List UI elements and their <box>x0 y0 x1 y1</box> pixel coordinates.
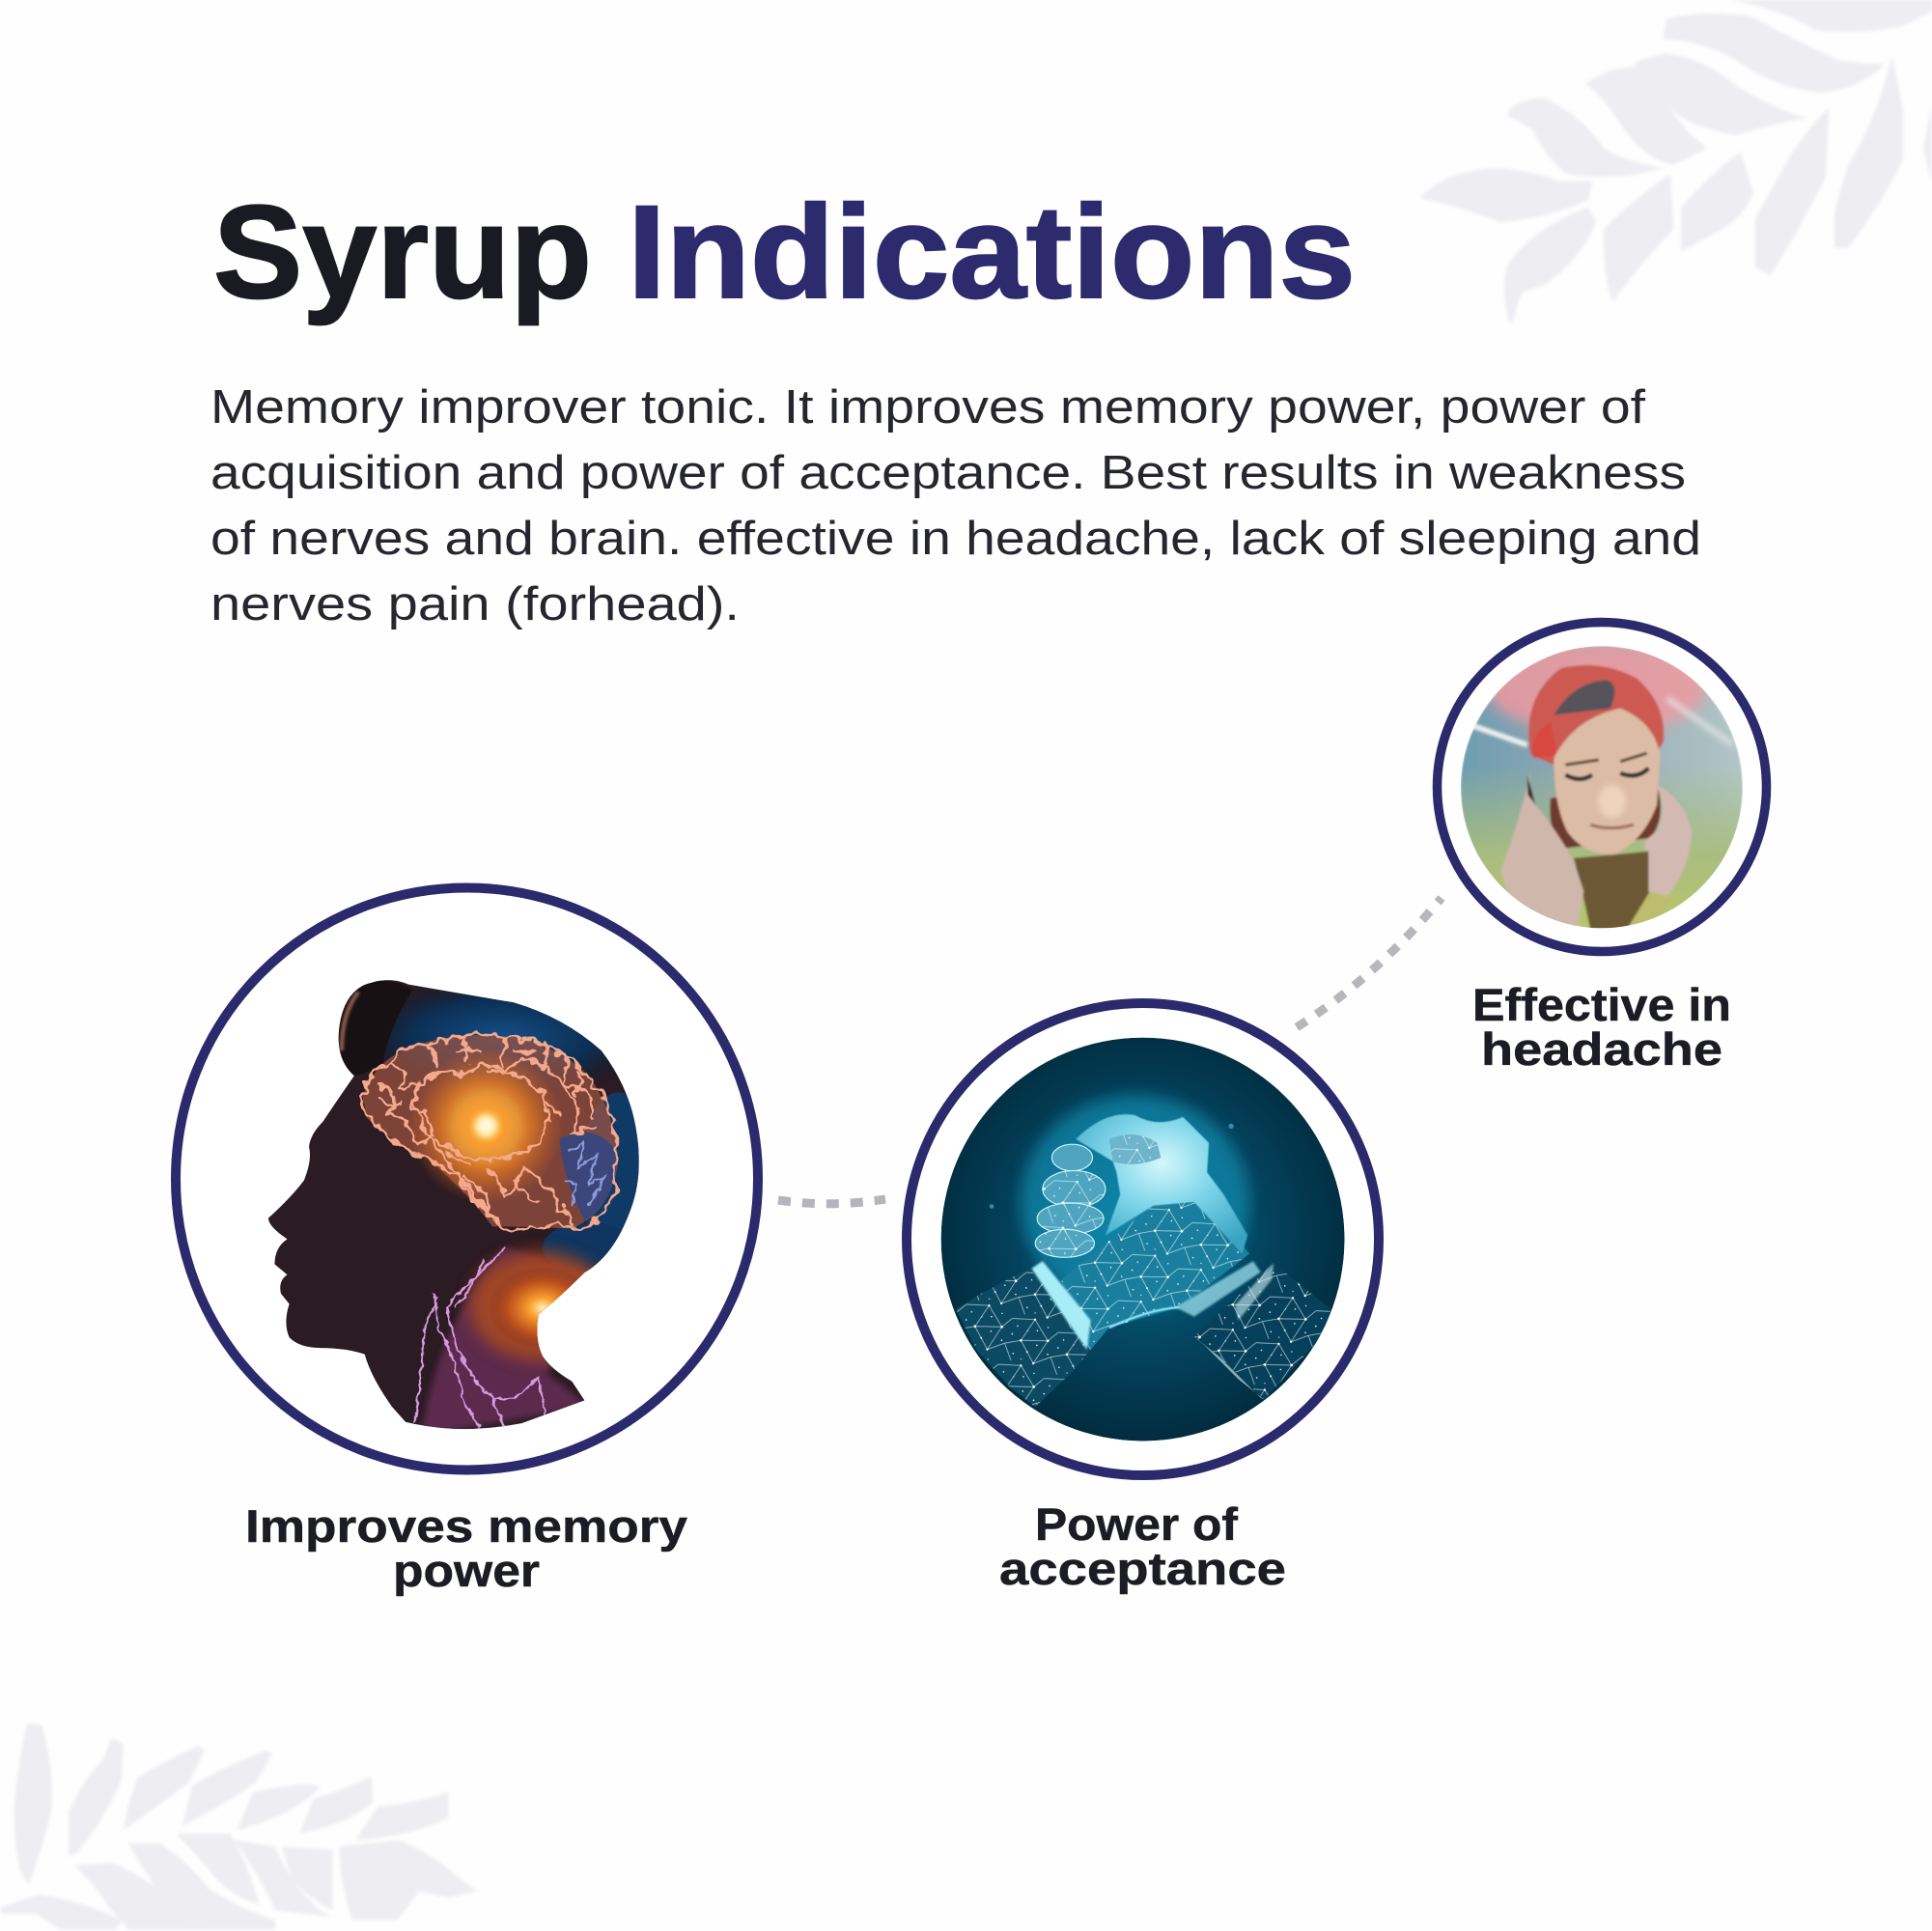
image: glowing clasped hands <box>941 1038 1345 1441</box>
label: power of acceptance: acceptance <box>999 1543 1286 1594</box>
dotted connector: acceptance to headache <box>1297 898 1442 1027</box>
label: power of acceptance <box>999 1498 1286 1594</box>
circle: improves memory power <box>176 888 758 1469</box>
circle: power of acceptance <box>907 1003 1379 1475</box>
circle: effective in headache <box>1437 622 1767 952</box>
description text <box>210 381 1701 630</box>
label: effective in headache <box>1472 979 1731 1075</box>
title <box>213 179 1356 326</box>
description text: nerves pain (forhead). <box>210 578 740 630</box>
label: improves memory power: power <box>393 1545 540 1596</box>
dotted connector: memory to acceptance <box>778 1199 885 1204</box>
description text: Memory improver tonic. It improves memory power, power of <box>210 381 1645 434</box>
image: woman with headache <box>1461 642 1744 931</box>
image: head with glowing brain <box>262 971 656 1436</box>
description text: acquisition and power of acceptance. Best results in weakness <box>210 447 1686 499</box>
label: effective in headache: Effective in <box>1472 979 1731 1030</box>
label: power of acceptance: Power of <box>1035 1498 1238 1550</box>
decorative leaf: bottom left <box>0 1723 477 1930</box>
title: Indications <box>628 179 1356 326</box>
description text: of nerves and brain. effective in headache, lack of sleeping and <box>210 513 1701 565</box>
label: improves memory power: Improves memory <box>245 1500 687 1552</box>
decorative leaf: top right <box>1420 0 1932 325</box>
label: improves memory power <box>245 1500 687 1596</box>
title: Syrup <box>213 179 592 326</box>
label: effective in headache: headache <box>1481 1023 1722 1075</box>
